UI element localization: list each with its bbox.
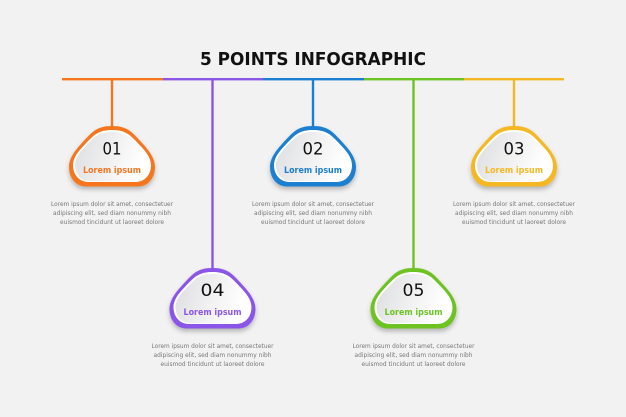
- point 05: 05: [402, 281, 424, 301]
- point 03: Lorem ipsum dolor sit amet, consectetuer: [453, 201, 575, 208]
- point 02: Lorem ipsum dolor sit amet, consectetuer: [252, 201, 374, 208]
- point 02: [252, 79, 374, 226]
- point 02: Lorem ipsum: [284, 165, 342, 176]
- point 01: euismod tincidunt ut laoreet dolore: [60, 219, 164, 226]
- point 03: Lorem ipsum: [485, 165, 543, 176]
- point 04: [152, 79, 274, 368]
- point 01: [51, 79, 173, 226]
- point 05: Lorem ipsum: [384, 307, 442, 318]
- timeline bar: [62, 78, 564, 80]
- point 02: euismod tincidunt ut laoreet dolore: [261, 219, 365, 226]
- point 01: 01: [102, 140, 122, 160]
- point 05: adipiscing elit, sed diam nonummy nibh: [354, 352, 473, 359]
- title: 5 POINTS INFOGRAPHIC: [200, 50, 426, 70]
- point 02: 02: [302, 140, 324, 160]
- point 03: adipiscing elit, sed diam nonummy nibh: [455, 210, 573, 217]
- point 03: euismod tincidunt ut laoreet dolore: [462, 219, 566, 226]
- point 04: Lorem ipsum dolor sit amet, consectetuer: [152, 343, 274, 350]
- point 02: adipiscing elit, sed diam nonummy nibh: [254, 210, 372, 217]
- point 05: euismod tincidunt ut laoreet dolore: [362, 361, 466, 368]
- point 03: [453, 79, 575, 226]
- point 05: [352, 79, 475, 368]
- point 03: 03: [504, 140, 524, 160]
- point 01: Lorem ipsum dolor sit amet, consectetuer: [51, 201, 173, 208]
- point 04: 04: [200, 281, 224, 301]
- point 01: adipiscing elit, sed diam nonummy nibh: [53, 210, 171, 217]
- point 04: adipiscing elit, sed diam nonummy nibh: [154, 352, 272, 359]
- point 01: Lorem ipsum: [83, 165, 141, 176]
- point 04: euismod tincidunt ut laoreet dolore: [160, 361, 265, 368]
- point 04: Lorem ipsum: [184, 307, 242, 318]
- point 05: Lorem ipsum dolor sit amet, consectetuer: [352, 343, 475, 350]
